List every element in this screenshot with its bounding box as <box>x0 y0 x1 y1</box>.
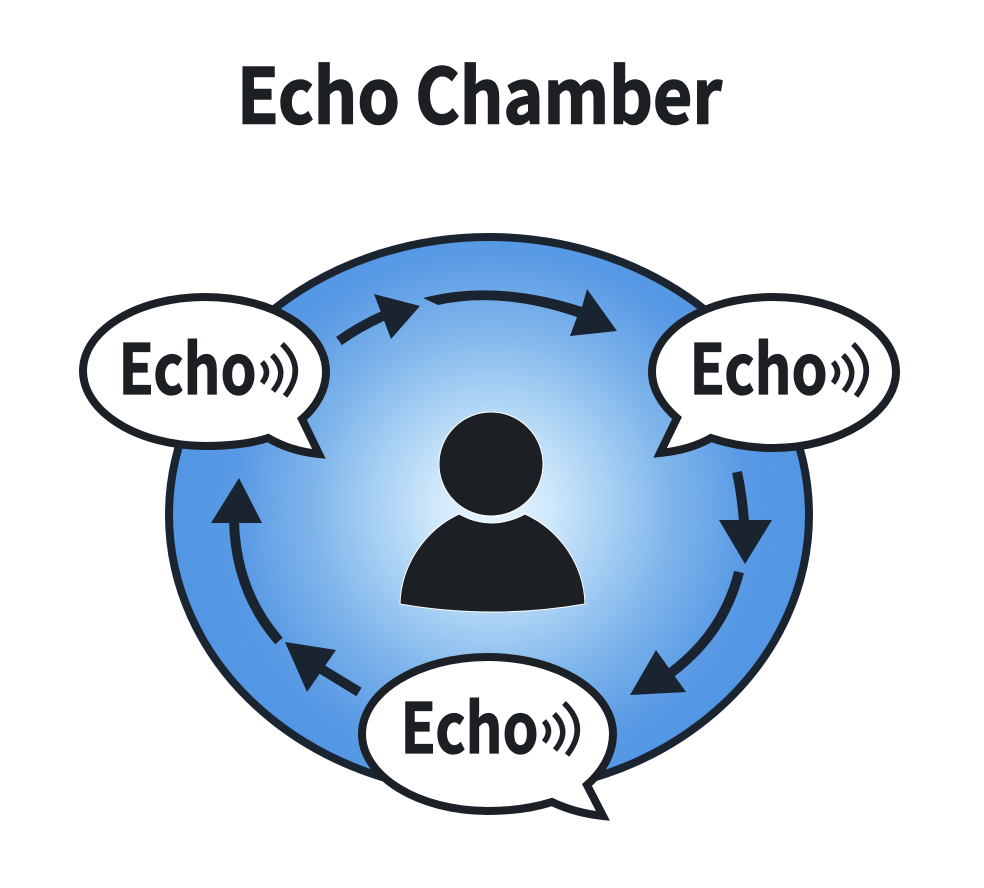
speech bubble: right: Echo <box>690 314 828 414</box>
arrow: left <box>211 478 279 641</box>
arrow: top left <box>339 294 420 341</box>
arrow: top right <box>423 289 617 336</box>
title: Echo Chamber <box>237 36 723 146</box>
arrow: bottom left <box>285 642 359 692</box>
speech bubble: right <box>652 297 896 453</box>
speech bubble: bottom: Echo <box>400 673 538 773</box>
arrow: right upper <box>719 472 772 564</box>
chamber circle <box>169 237 809 793</box>
speech bubble: bottom <box>362 657 613 816</box>
arrow: right lower <box>630 572 739 695</box>
icon: person <box>400 412 585 612</box>
arrows <box>211 289 772 695</box>
speech bubble: left <box>83 297 326 454</box>
speech bubble: left: Echo <box>118 314 256 414</box>
